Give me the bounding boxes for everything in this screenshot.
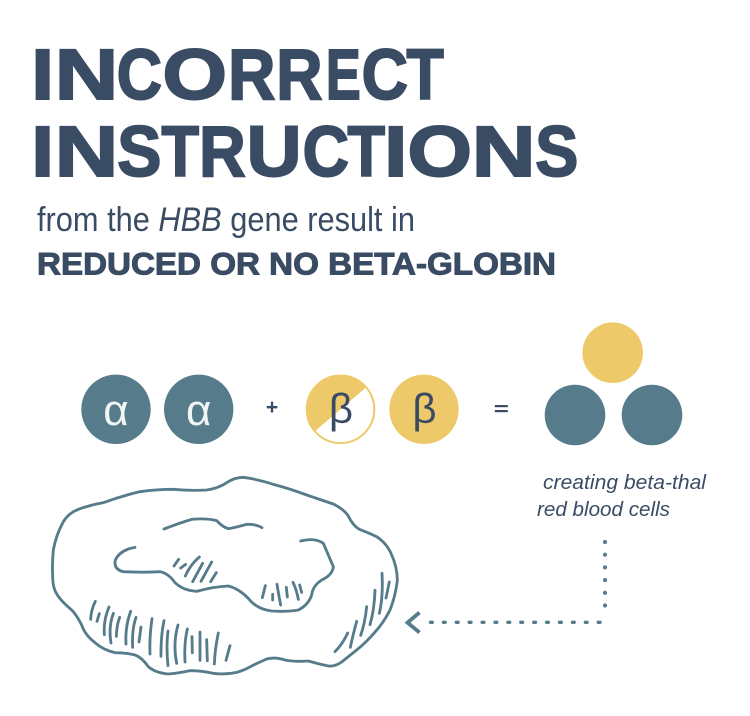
plus sign: + [266, 396, 278, 419]
title line 2: I [384, 112, 407, 191]
partial beta circle [307, 376, 374, 443]
subtitle line: from the HBB gene result in [37, 201, 415, 239]
caption: red blood cells [537, 498, 670, 521]
title line 1: I [31, 35, 54, 115]
full beta circle: β [412, 385, 437, 432]
title line 1: R [276, 35, 322, 115]
title line 1: N [55, 35, 118, 115]
shading hatches: inner upper [174, 557, 216, 582]
hemoglobin: alpha subunit left [545, 385, 605, 445]
title [31, 35, 578, 191]
title line 2: U [247, 112, 302, 191]
title line 1: C [362, 35, 408, 115]
title line 2: N [55, 112, 118, 191]
title line 2: T [161, 112, 199, 191]
hemoglobin: alpha subunit right [622, 385, 682, 445]
alpha circle 1 [81, 375, 151, 444]
shading hatches: lower left [91, 601, 230, 666]
title line 1: O [162, 35, 227, 115]
upper inner fold [164, 519, 262, 529]
hemoglobin: beta subunit [582, 322, 643, 383]
partial beta circle: β [329, 385, 353, 432]
shading hatches: right edge [335, 573, 389, 652]
title line 1: T [406, 35, 444, 115]
title line 1 [31, 35, 444, 115]
caption: creating beta-thal [543, 471, 707, 494]
title line 2: S [117, 112, 161, 191]
full beta circle [389, 375, 459, 444]
title line 2 [31, 112, 578, 191]
red blood cell illustration [52, 477, 397, 674]
title line 1: C [117, 35, 162, 115]
title line 2: T [347, 112, 385, 191]
alpha circle 2: α [186, 386, 211, 435]
cell outline [52, 477, 397, 674]
title line 1: R [228, 35, 275, 115]
alpha circle 2 [164, 375, 233, 444]
subtitle emphasis: REDUCED OR NO BETA-GLOBIN [37, 246, 556, 282]
title line 2: O [407, 112, 472, 191]
title line 2: N [471, 112, 535, 191]
title line 2: C [303, 112, 349, 191]
alpha circle 1: α [103, 386, 129, 435]
title line 1: E [326, 35, 361, 115]
title line 2: I [31, 112, 54, 191]
dotted arrow [408, 542, 605, 632]
caption [537, 471, 707, 521]
inner hollow contour [115, 540, 333, 611]
title line 2: R [199, 112, 245, 191]
equals sign [495, 405, 508, 412]
shading hatches: inner lower [262, 582, 302, 605]
title line 2: S [535, 112, 578, 191]
